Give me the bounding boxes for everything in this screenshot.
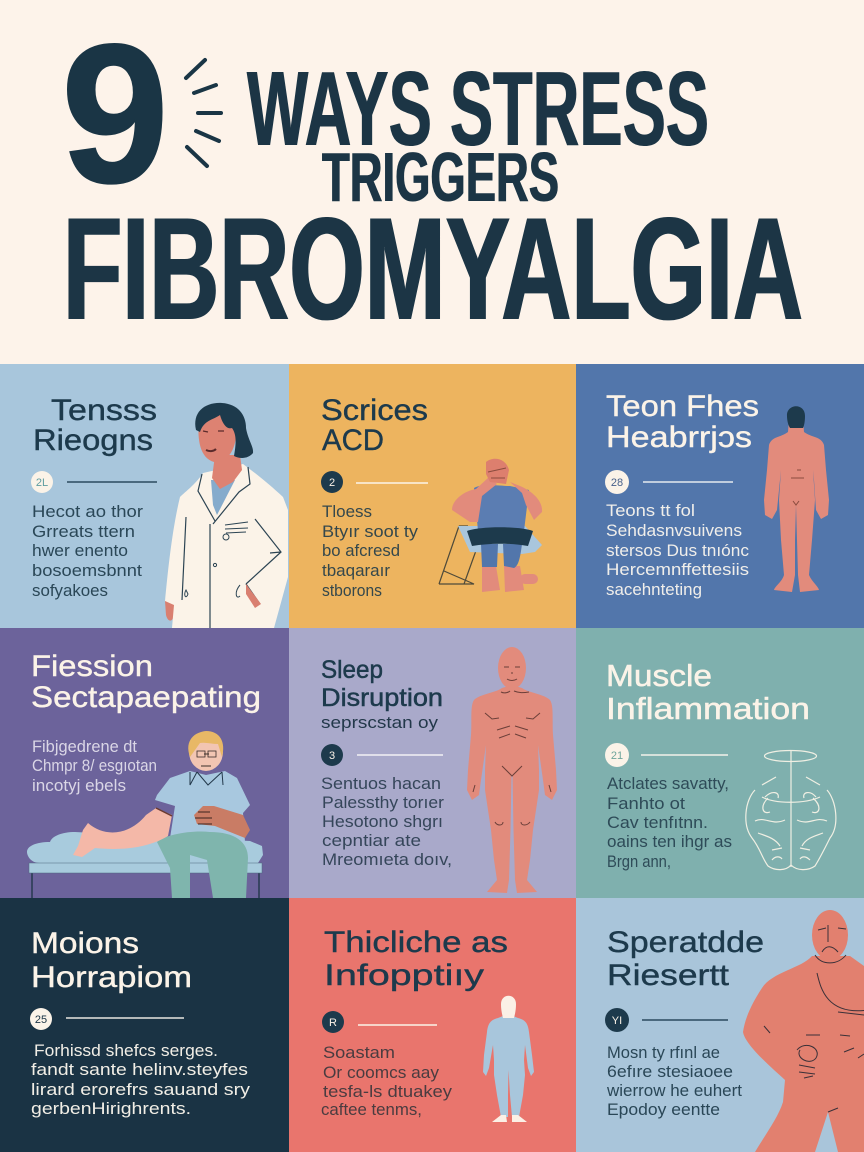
number badge: 2L: [36, 477, 48, 489]
body text: Brgn ann,: [607, 853, 671, 871]
divider: [357, 754, 443, 756]
heading: Thicliche as: [324, 926, 508, 959]
number badge: 21: [611, 750, 623, 762]
illustration: standing body: [467, 647, 557, 893]
body text: Tloess: [322, 503, 372, 521]
body text: incotyj ebels: [32, 777, 126, 795]
heading: Teon Fhes: [606, 390, 759, 423]
body text: [31, 1042, 251, 1118]
big numeral 9: 9: [61, 3, 169, 224]
illustration: seated person: [439, 459, 542, 592]
body text: Mreomıeta doıv,: [322, 851, 452, 869]
number badge: [30, 1008, 52, 1030]
body text: [322, 503, 419, 600]
body text: [606, 1044, 742, 1119]
number badge: YI: [612, 1015, 622, 1027]
body text: gerbenHirighrents.: [31, 1100, 191, 1118]
number badge: [321, 744, 343, 766]
body text: fandt sante helinv.steyfes: [31, 1061, 248, 1079]
title line: triggers: TRIGGERS: [322, 138, 559, 216]
body text: stborons: [322, 582, 382, 600]
body text: Hesotono shgrı: [322, 813, 443, 831]
body text: sofyakoes: [32, 582, 108, 600]
body text: Sentuos hacan: [321, 775, 441, 793]
icon: burst ticks: [186, 60, 221, 166]
panel: fiession: [0, 628, 289, 898]
body text: [607, 775, 732, 871]
body text: sacehnteting: [606, 581, 702, 599]
illustration: doctor: [165, 403, 288, 628]
panel background: [0, 628, 289, 898]
illustration: blue body figure: [483, 996, 534, 1122]
body text: Hercemnffettesiis: [606, 561, 749, 579]
body text: Teons tt fol: [606, 502, 695, 520]
body text: [32, 503, 144, 600]
body text: caftee tenms,: [321, 1101, 422, 1119]
illustration: standing body from behind: [764, 406, 829, 592]
body text: Atclates savatty,: [607, 775, 729, 793]
body text: hwer enento: [32, 542, 128, 560]
divider: [643, 481, 733, 483]
panel: teon fhes: [576, 364, 864, 628]
body text: [32, 738, 157, 795]
panel: muscle inflammation: [576, 628, 864, 898]
body text: Sehdasnvsuivens: [606, 522, 742, 540]
heading: Moions: [31, 927, 139, 960]
heading second line: Riesertt: [607, 959, 730, 992]
body text: stersos Dus tnıónc: [606, 542, 749, 560]
number badge: 2: [329, 477, 335, 489]
body text: Cav tenfıtnn.: [607, 814, 708, 832]
number badge: R: [329, 1017, 337, 1029]
illustration: large torso: [743, 910, 864, 1152]
heading: Speratdde: [607, 926, 764, 959]
number badge: 28: [611, 477, 623, 489]
number badge: 3: [329, 750, 335, 762]
panel: moions: [0, 898, 289, 1152]
panel: tension: [0, 364, 289, 628]
divider: [66, 1017, 184, 1019]
heading second line: Heabrrjɔs: [606, 421, 752, 454]
panel: thicliche: [289, 898, 576, 1152]
panel: scrices: [289, 364, 576, 628]
heading second line: Horrapiom: [31, 961, 192, 994]
body text: [321, 775, 452, 869]
icon: line art body scan: [746, 750, 836, 870]
body text: cepntiar ate: [322, 832, 421, 850]
body text: Forhissd shefcs serges.: [34, 1042, 218, 1060]
heading: Tensss: [51, 394, 157, 427]
body text: bo afcresd: [322, 542, 400, 560]
number badge: [31, 471, 53, 493]
divider: [642, 1019, 728, 1021]
body text: 6efıre stesiaoee: [607, 1063, 733, 1081]
body text: bosoemsbnnt: [32, 562, 142, 580]
number badge: [321, 471, 343, 493]
heading second line: Inflammation: [606, 691, 810, 726]
panel: speratdde: [576, 898, 864, 1152]
body text: Fanhto ot: [607, 795, 685, 813]
panel background: [289, 628, 576, 898]
heading: Muscle: [606, 658, 712, 693]
body text: lirard erorefrs sauand sry: [31, 1081, 251, 1099]
number badge: [605, 743, 629, 767]
body text: tbaqaraır: [322, 562, 391, 580]
divider: [358, 1024, 437, 1026]
body text: oains ten ihgr as: [607, 833, 732, 851]
panel background: [0, 898, 289, 1152]
body text: [606, 502, 749, 599]
heading: Scrices: [321, 394, 428, 427]
body text: Epodoy eentte: [607, 1101, 720, 1119]
heading second line: Disruption: [321, 684, 443, 712]
body text: Chmpr 8/ esgıotan: [32, 757, 157, 775]
subheading: seprscstan oy: [321, 714, 439, 732]
number badge: [322, 1011, 344, 1033]
body text: Mosn ty rfınl ae: [607, 1044, 720, 1062]
body text: Fibjgedrene dt: [32, 738, 137, 756]
panel: sleep disruption: [289, 628, 576, 898]
number badge: [605, 1008, 629, 1032]
divider: [356, 482, 428, 484]
panel background: [576, 364, 864, 628]
number badge: [605, 470, 629, 494]
heading: Fiession: [31, 650, 153, 683]
body text: Grreats ttern: [32, 523, 135, 541]
heading second line: Infopptiıy: [324, 959, 484, 992]
number badge: 25: [35, 1014, 47, 1026]
heading second line: Sectapaepating: [31, 681, 261, 714]
body text: wierrow he euhert: [606, 1082, 742, 1100]
panel background: [576, 628, 864, 898]
body text: Btyır soot ty: [322, 523, 419, 541]
panel background: [0, 364, 289, 628]
title block: [61, 3, 803, 350]
body text: Or coomcs aay: [323, 1064, 440, 1082]
panel background: [289, 364, 576, 628]
body text: Soastam: [323, 1044, 395, 1062]
panel background: [289, 898, 576, 1152]
body text: tesfa-ls dtuakey: [323, 1083, 453, 1101]
body text: Palessthy torıer: [322, 794, 445, 812]
illustration: man on exam bench: [27, 731, 263, 898]
heading second line: Rieogns: [33, 424, 153, 457]
panel background: [576, 898, 864, 1152]
body text: Hecot ao thor: [32, 503, 144, 521]
heading: Sleep: [321, 656, 383, 684]
heading second line: ACD: [322, 424, 384, 457]
divider: [67, 481, 157, 483]
divider: [641, 754, 728, 756]
body text: [321, 1044, 453, 1119]
